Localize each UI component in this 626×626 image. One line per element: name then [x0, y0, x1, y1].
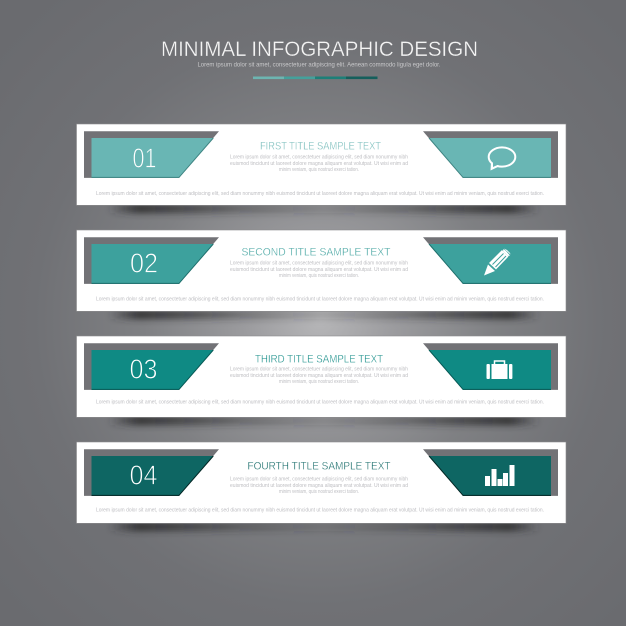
card [76, 336, 566, 417]
right tab backing [423, 237, 558, 284]
body text [230, 154, 408, 173]
right tab [429, 244, 551, 284]
right tab [429, 350, 551, 390]
subtitle: Lorem ipsum dolor sit amet, consectetuer adipiscing elit. Aenean commodo ligula eget dolor. [198, 62, 441, 68]
panel: 02 [76, 230, 566, 319]
body text [230, 260, 408, 279]
body text: minim veniam, quis nostrud exerci tation. [279, 273, 359, 279]
footer text: Lorem ipsum dolor sit amet, consectetuer adipiscing elit, sed diam nonummy nibh euismod tincidunt ut laoreet dolore magna aliquam erat volutpat. Ut wisi enim ad minim veniam, quis nostrud exerci tation. [96, 400, 544, 406]
number: 02 [130, 248, 158, 278]
right tab [429, 456, 551, 496]
heading: THIRD TITLE SAMPLE TEXT [255, 354, 383, 366]
left tab backing [84, 449, 219, 496]
panel shadow [108, 522, 540, 531]
panel shadow [108, 310, 540, 319]
left tab [92, 244, 213, 284]
right tab backing [423, 449, 558, 496]
left tab backing [84, 131, 219, 178]
number: 01 [132, 142, 156, 174]
card [76, 230, 566, 311]
number: 03 [130, 354, 158, 384]
body text: minim veniam, quis nostrud exerci tation. [279, 489, 359, 495]
body text: Lorem ipsum dolor sit amet, consectetuer adipiscing elit, sed diam nonummy nibh [230, 476, 408, 482]
body text: minim veniam, quis nostrud exerci tation. [279, 167, 359, 173]
panel: 01 [76, 124, 566, 213]
left tab backing [84, 237, 219, 284]
body text: euismod tincidunt ut laoreet dolore magna aliquam erat volutpat. Ut wisi enim ad [230, 483, 408, 489]
panel shadow [108, 416, 540, 425]
panel: 04 [76, 442, 566, 531]
body text: euismod tincidunt ut laoreet dolore magna aliquam erat volutpat. Ut wisi enim ad [230, 267, 408, 273]
body text: minim veniam, quis nostrud exerci tation. [279, 379, 359, 385]
body text: Lorem ipsum dolor sit amet, consectetuer adipiscing elit, sed diam nonummy nibh [230, 154, 408, 160]
right tab backing [423, 131, 558, 178]
body text: euismod tincidunt ut laoreet dolore magna aliquam erat volutpat. Ut wisi enim ad [230, 161, 408, 167]
card [76, 124, 566, 205]
body text: euismod tincidunt ut laoreet dolore magna aliquam erat volutpat. Ut wisi enim ad [230, 373, 408, 379]
body text: Lorem ipsum dolor sit amet, consectetuer adipiscing elit, sed diam nonummy nibh [230, 260, 408, 266]
body text [230, 366, 408, 385]
body text: Lorem ipsum dolor sit amet, consectetuer adipiscing elit, sed diam nonummy nibh [230, 366, 408, 372]
left tab [92, 456, 213, 496]
icon: speech bubble [489, 147, 515, 170]
title: MINIMAL INFOGRAPHIC DESIGN [161, 38, 478, 61]
left tab backing [84, 343, 219, 390]
left tab [92, 138, 213, 178]
body text [230, 476, 408, 495]
card [76, 442, 566, 523]
footer text: Lorem ipsum dolor sit amet, consectetuer adipiscing elit, sed diam nonummy nibh euismod tincidunt ut laoreet dolore magna aliquam erat volutpat. Ut wisi enim ad minim veniam, quis nostrud exerci tation. [96, 191, 544, 197]
footer text: Lorem ipsum dolor sit amet, consectetuer adipiscing elit, sed diam nonummy nibh euismod tincidunt ut laoreet dolore magna aliquam erat volutpat. Ut wisi enim ad minim veniam, quis nostrud exerci tation. [96, 296, 544, 302]
heading: FIRST TITLE SAMPLE TEXT [260, 140, 381, 152]
icon: briefcase [486, 361, 512, 379]
header colour bar [253, 76, 378, 79]
right tab [429, 138, 551, 178]
heading: SECOND TITLE SAMPLE TEXT [242, 246, 391, 258]
icon: pencil [484, 248, 510, 276]
footer text: Lorem ipsum dolor sit amet, consectetuer adipiscing elit, sed diam nonummy nibh euismod tincidunt ut laoreet dolore magna aliquam erat volutpat. Ut wisi enim ad minim veniam, quis nostrud exerci tation. [96, 508, 544, 514]
heading: FOURTH TITLE SAMPLE TEXT [248, 460, 391, 472]
right tab backing [423, 343, 558, 390]
panel shadow [108, 204, 540, 213]
left tab [92, 350, 213, 390]
panel: 03 [76, 336, 566, 425]
icon: bar chart [485, 465, 514, 486]
number: 04 [130, 460, 158, 490]
